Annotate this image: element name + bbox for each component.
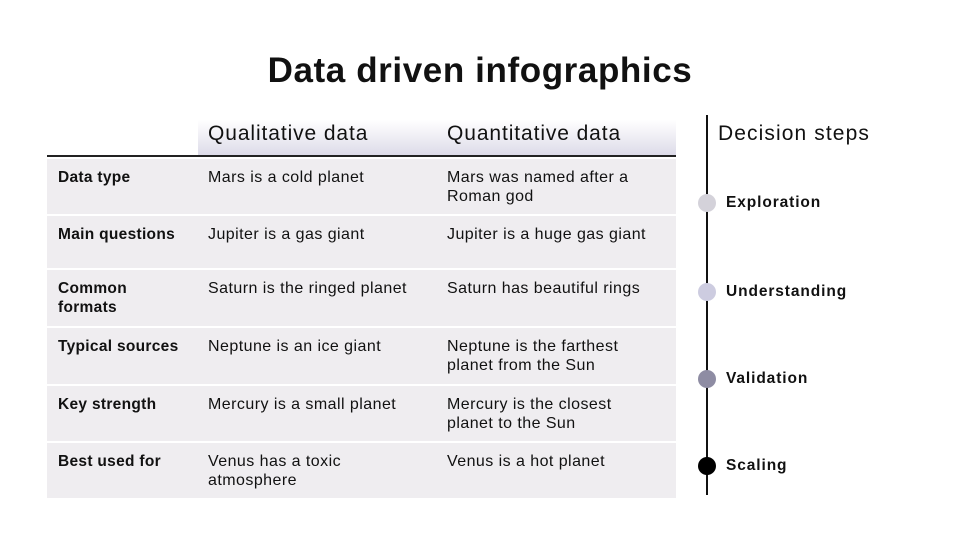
row: best used for: atmosphere xyxy=(208,472,297,489)
row: data type: Data type xyxy=(58,169,130,186)
row: data type: Mars is a cold planet xyxy=(208,169,364,186)
header: qualitative: Qualitative data xyxy=(208,122,368,145)
row: data type: Roman god xyxy=(447,188,534,205)
timeline heading: Decision steps xyxy=(718,122,870,145)
row: key strength: Mercury is the closest xyxy=(447,396,612,413)
title: Data driven infographics xyxy=(268,51,692,90)
row: typical sources: Typical sources xyxy=(58,338,179,355)
row: best used for: Venus is a hot planet xyxy=(447,453,605,470)
row: best used for xyxy=(47,441,676,498)
header rule xyxy=(47,155,676,156)
step: validation: Validation xyxy=(726,370,808,387)
step: exploration: Exploration xyxy=(726,194,821,211)
row: common formats: Saturn has beautiful rings xyxy=(447,280,640,297)
row: main questions: Jupiter is a gas giant xyxy=(208,226,365,243)
table header xyxy=(198,120,676,156)
row: typical sources: Neptune is an ice giant xyxy=(208,338,381,355)
row: key strength: planet to the Sun xyxy=(447,415,576,432)
row: common formats xyxy=(47,268,676,326)
step: scaling xyxy=(698,457,787,475)
step: scaling: Scaling xyxy=(726,457,787,474)
row: best used for: Best used for xyxy=(58,453,161,470)
row: typical sources xyxy=(47,326,676,384)
row: main questions: Main questions xyxy=(58,226,175,243)
row: key strength: Key strength xyxy=(58,396,156,413)
timeline line xyxy=(706,115,708,495)
row: main questions xyxy=(47,214,676,268)
row: best used for: Venus has a toxic xyxy=(208,453,341,470)
table rows xyxy=(47,159,676,498)
row: typical sources: Neptune is the farthest xyxy=(447,338,618,355)
step: understanding: Understanding xyxy=(726,283,847,300)
row: key strength: Mercury is a small planet xyxy=(208,396,396,413)
header: quantitative: Quantitative data xyxy=(447,122,621,145)
row: main questions: Jupiter is a huge gas giant xyxy=(447,226,646,243)
row: common formats: Common xyxy=(58,280,127,297)
row: key strength xyxy=(47,384,676,441)
row: data type: Mars was named after a xyxy=(447,169,629,186)
row: common formats: formats xyxy=(58,299,117,316)
row: typical sources: planet from the Sun xyxy=(447,357,595,374)
row: data type xyxy=(47,157,676,214)
row: common formats: Saturn is the ringed planet xyxy=(208,280,407,297)
